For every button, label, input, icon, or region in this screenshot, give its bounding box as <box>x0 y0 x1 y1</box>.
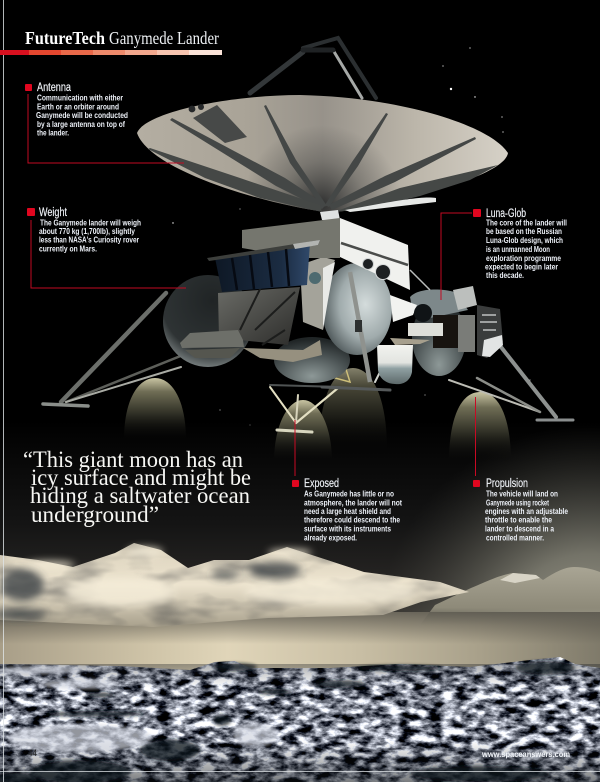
antenna body text <box>36 94 128 138</box>
luna-glob body text: exploration programme <box>486 254 561 263</box>
exposed body text: atmosphere, the lander will not <box>304 498 402 508</box>
far horizon band <box>0 612 600 670</box>
exposed bullet <box>292 480 299 487</box>
callout: Antenna <box>25 82 184 163</box>
exposed body text: As Ganymede has little or no <box>304 490 394 498</box>
exposed leader line <box>294 420 296 476</box>
propulsion body text <box>485 490 568 542</box>
propulsion heading: Propulsion <box>486 478 528 490</box>
strut joint <box>355 320 362 332</box>
website url: www.spaceanswers.com <box>481 749 570 759</box>
stars <box>172 47 531 425</box>
title colour bar <box>0 50 222 55</box>
pull quote: icy surface and might be <box>31 465 251 491</box>
landscape <box>0 543 600 782</box>
far right mountains <box>420 567 600 625</box>
luna-glob body text: Luna-Glob design, which <box>486 236 563 245</box>
luna-glob body text: expected to begin later <box>485 262 559 272</box>
solar panel array <box>207 240 320 292</box>
exposed body text: need a large heat shield and <box>304 507 391 516</box>
callout: Weight <box>27 207 186 288</box>
antenna body text: Communication with either <box>37 94 124 102</box>
propulsion body text: The vehicle will land on <box>486 490 558 498</box>
propulsion body text: engines with an adjustable <box>485 507 568 516</box>
tan box below <box>390 338 430 345</box>
weight body text: currently on Mars. <box>39 244 97 254</box>
foreground bright slope <box>0 666 277 752</box>
mountain shading texture <box>0 543 469 627</box>
connector strut <box>410 270 430 290</box>
antenna bullet <box>25 84 32 91</box>
weight heading: Weight <box>39 207 68 219</box>
pull quote: underground” <box>31 502 159 528</box>
weight bullet <box>27 208 35 216</box>
exposed heading: Exposed <box>304 478 339 490</box>
antenna body text: by a large antenna on top of <box>37 120 125 129</box>
luna-glob body text: this decade. <box>486 271 524 280</box>
feed horn box <box>193 105 247 143</box>
propulsion bullet <box>473 480 480 487</box>
deck plate <box>180 330 244 348</box>
mountain shadows <box>0 562 301 619</box>
propulsion body text: lander to descend in a <box>485 524 554 534</box>
nozzle <box>414 304 432 322</box>
white box <box>408 323 443 336</box>
distant haze sky <box>0 420 600 650</box>
foreground dark ridges <box>0 661 575 782</box>
equipment bay <box>218 287 300 345</box>
propulsion leader line <box>474 397 476 476</box>
weight body text: about 770 kg (1,700lb), slightly <box>39 227 135 236</box>
luna-glob body text: is an unmanned Moon <box>486 245 550 254</box>
weight body text <box>39 218 141 254</box>
right instrument block <box>390 270 503 358</box>
weight body text: The Ganymede lander will weigh <box>40 218 141 228</box>
side module <box>300 257 335 330</box>
callout: Propulsion <box>473 397 568 542</box>
weight leader line <box>31 220 186 288</box>
page number: 44 <box>28 748 37 758</box>
bay struts <box>240 285 295 345</box>
propulsion body text: throttle to enable the <box>485 516 552 524</box>
rocky foreground <box>0 657 600 782</box>
propellant tanks <box>163 275 466 383</box>
weight body text: less than NASA's Curiosity rover <box>39 236 140 244</box>
rock noise texture <box>0 657 600 782</box>
deck plate shadow <box>185 348 240 358</box>
side module white patch <box>323 262 335 330</box>
central tank <box>322 263 392 355</box>
opening <box>433 315 459 348</box>
exposed body text: surface with its instruments <box>304 524 391 534</box>
title <box>25 28 219 48</box>
engine plumes <box>124 368 511 462</box>
exposed body text: already exposed. <box>304 534 357 542</box>
landing legs <box>43 293 573 432</box>
pull quote: “This giant moon has an <box>23 447 243 473</box>
band shading <box>0 612 600 644</box>
antenna body text: the lander. <box>37 128 69 138</box>
dish bright rim <box>345 197 436 212</box>
pull quote: hiding a saltwater ocean <box>30 483 250 509</box>
main mountain range <box>0 543 469 627</box>
luna-glob heading: Luna-Glob <box>486 208 526 220</box>
propulsion body text: Ganymede using rocket <box>486 498 549 508</box>
dish antenna <box>137 95 508 212</box>
callout: Exposed <box>292 420 402 542</box>
luna-glob body text: The core of the lander will <box>486 218 567 228</box>
propulsion body text: controlled manner. <box>486 534 544 542</box>
antenna body text: Ganymede will be conducted <box>36 111 128 120</box>
antenna heading: Antenna <box>37 82 71 94</box>
dish mount <box>320 210 340 220</box>
mountain highlights <box>25 547 415 606</box>
exposed body text <box>304 490 402 542</box>
dish ribs <box>148 105 498 212</box>
bridge <box>390 295 417 322</box>
top equipment box <box>242 218 410 290</box>
antenna body text: Earth or an orbiter around <box>37 102 119 112</box>
block <box>458 315 475 352</box>
callout: Luna-Glob <box>441 208 567 300</box>
white lower cylinder <box>377 345 413 384</box>
electronics cluster <box>477 305 503 358</box>
lander illustration <box>43 38 573 462</box>
snow cap <box>500 573 540 583</box>
title: Ganymede Lander <box>109 28 219 48</box>
luna-glob bullet <box>473 209 481 217</box>
luna-glob body text <box>485 218 567 280</box>
small sphere <box>309 272 321 284</box>
luna-glob body text: be based on the Russian <box>486 227 562 236</box>
title: FutureTech <box>25 28 105 48</box>
antenna feed tripod <box>250 38 376 98</box>
central strut <box>350 272 370 382</box>
antenna leader line <box>28 94 184 163</box>
lower tan deck <box>243 340 322 362</box>
exposed body text: therefore could descend to the <box>304 516 400 524</box>
upper dome <box>410 289 468 318</box>
pull quote <box>23 447 251 528</box>
luna-glob leader line <box>441 213 472 300</box>
